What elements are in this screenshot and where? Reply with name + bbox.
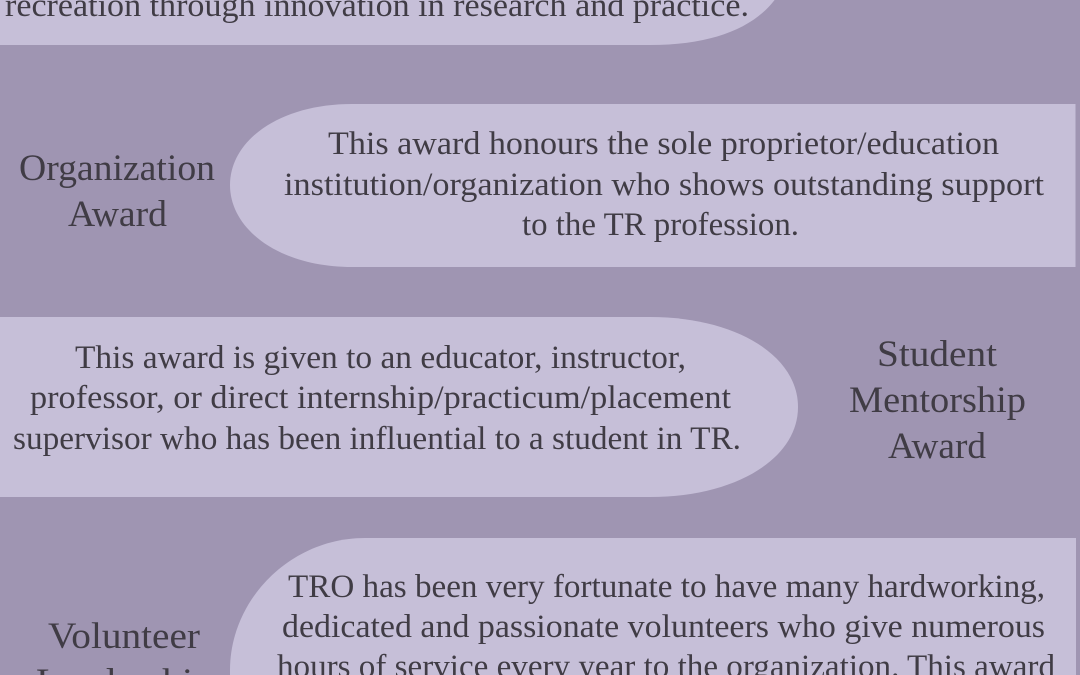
heading: organization award [19, 148, 215, 235]
panel: volunteer leadership award description [230, 538, 1076, 675]
panel: research award description [0, 0, 786, 45]
panel: student mentorship award description: This award is given to an educator, instructor, [75, 340, 686, 376]
heading: student mentorship award: Mentorship [849, 380, 1026, 421]
panel: organization award description [230, 104, 1076, 267]
heading: student mentorship award [849, 334, 1026, 467]
heading: volunteer leadership award: Volunteer [48, 616, 201, 657]
heading: student mentorship award: Student [877, 334, 998, 375]
panel: student mentorship award description: professor, or direct internship/practicum/placement [30, 380, 731, 416]
panel: organization award description: to the TR profession. [522, 207, 799, 243]
panel: organization award description: This award honours the sole proprietor/education [328, 126, 999, 162]
heading: student mentorship award: Award [888, 426, 986, 467]
heading: volunteer leadership award [36, 616, 213, 675]
panel: volunteer leadership award description: dedicated and passionate volunteers who give numerous [282, 609, 1045, 645]
heading: organization award: Organization [19, 148, 215, 189]
panel: student mentorship award description [0, 317, 798, 497]
heading: organization award: Award [68, 194, 167, 235]
panel: volunteer leadership award description: TRO has been very fortunate to have many hardworking, [288, 569, 1045, 605]
panel: organization award description: institution/organization who shows outstanding support [284, 167, 1044, 203]
panel: student mentorship award description: supervisor who has been influential to a student in TR. [13, 421, 741, 457]
